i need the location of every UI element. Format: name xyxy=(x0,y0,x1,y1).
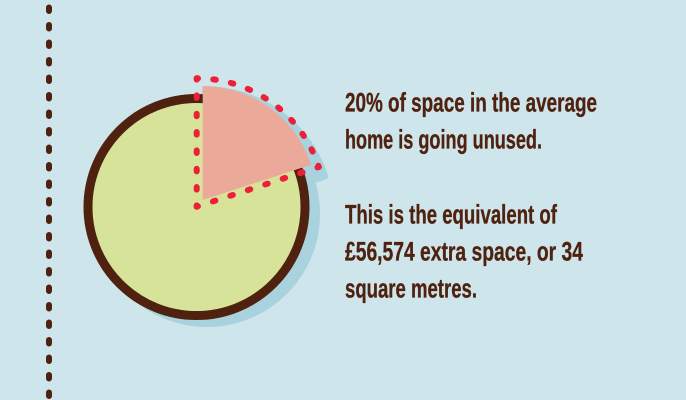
statement: equivalent value: square metres. xyxy=(345,273,477,303)
red dashed outline of wedge xyxy=(197,78,319,207)
statement: equivalent value: This is the equivalent of xyxy=(345,199,557,229)
unused 20% wedge xyxy=(203,86,311,200)
statement: equivalent value xyxy=(345,199,583,303)
pie drop shadow xyxy=(94,90,325,327)
statement: 20% unused: home is going unused. xyxy=(345,124,542,154)
statement: equivalent value: £56,574 extra space, or 34 xyxy=(345,237,583,267)
statement: 20% unused xyxy=(345,88,597,154)
pie ring and used space xyxy=(88,98,305,316)
dotted vertical timeline xyxy=(46,8,52,398)
pie chart: 20% unused space xyxy=(88,78,325,327)
